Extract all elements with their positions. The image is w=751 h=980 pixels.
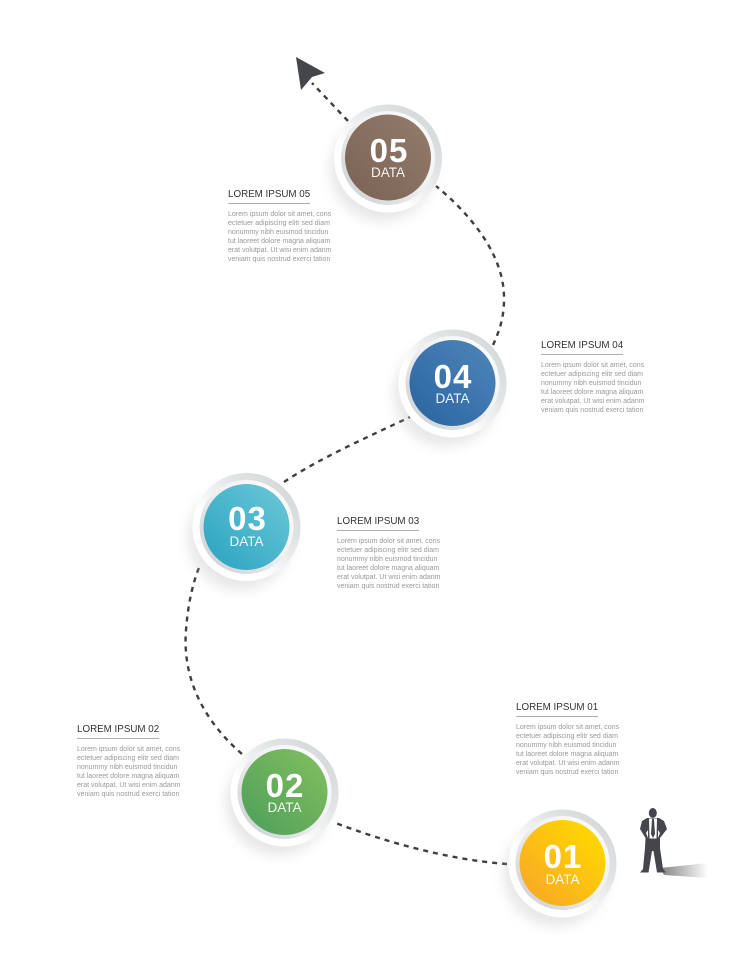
text block: Lorem Ipsum 04: LOREM IPSUM 04	[541, 340, 623, 351]
text block: Lorem Ipsum 04: erat volutpat. Ut wisi enim adanm	[541, 398, 644, 404]
text block: Lorem Ipsum 04	[541, 340, 644, 414]
text block: Lorem Ipsum 03: ectetuer adipiscing elitr sed diam	[337, 546, 439, 554]
text block: Lorem Ipsum 03: Lorem ipsum dolor sit amet, cons	[337, 538, 440, 544]
text block: Lorem Ipsum 02: nonummy nibh euismod tincidun	[77, 764, 177, 770]
step 04 circle	[394, 330, 506, 446]
step 04 circle: DATA	[435, 391, 470, 406]
step 03 circle: DATA	[229, 534, 264, 549]
text block: Lorem Ipsum 02: ectetuer adipiscing elitr sed diam	[77, 754, 179, 762]
dashed route	[186, 83, 507, 864]
step 02 circle: 02	[266, 767, 304, 804]
text block: Lorem Ipsum 01: nonummy nibh euismod tincidun	[516, 742, 616, 748]
text block: Lorem Ipsum 03: nonummy nibh euismod tincidun	[337, 556, 437, 562]
text block: Lorem Ipsum 03: erat volutpat. Ut wisi enim adanm	[337, 574, 440, 580]
text block: Lorem Ipsum 03: veniam quis nostrud exerci tation	[337, 582, 439, 590]
step 03 circle	[188, 473, 300, 590]
text block: Lorem Ipsum 01: veniam quis nostrud exerci tation	[516, 768, 618, 776]
text block: Lorem Ipsum 04: nonummy nibh euismod tincidun	[541, 380, 641, 386]
text block: Lorem Ipsum 04: ectetuer adipiscing elitr sed diam	[541, 370, 643, 378]
text block: Lorem Ipsum 04: tut laoreet dolore magna aliquam	[541, 388, 643, 396]
text block: Lorem Ipsum 02: tut laoreet dolore magna aliquam	[77, 772, 179, 780]
text block: Lorem Ipsum 05	[228, 189, 331, 262]
text block: Lorem Ipsum 03	[337, 516, 440, 590]
text block: Lorem Ipsum 01: erat volutpat. Ut wisi enim adanm	[516, 760, 619, 766]
step 05 circle: 05	[370, 132, 408, 169]
text block: Lorem Ipsum 02: erat volutpat. Ut wisi enim adanm	[77, 782, 180, 788]
text block: Lorem Ipsum 05: nonummy nibh euismod tincidun	[228, 228, 328, 236]
text block: Lorem Ipsum 05: veniam quis nostrud exerci tation	[228, 256, 330, 262]
text block: Lorem Ipsum 03: tut laoreet dolore magna aliquam	[337, 564, 439, 572]
step 01 circle: 01	[544, 838, 582, 875]
text block: Lorem Ipsum 01: tut laoreet dolore magna aliquam	[516, 750, 618, 758]
step 04 circle: 04	[434, 358, 472, 395]
text block: Lorem Ipsum 04: veniam quis nostrud exerci tation	[541, 406, 643, 414]
step 05 circle	[330, 104, 442, 221]
text block: Lorem Ipsum 05: LOREM IPSUM 05	[228, 189, 310, 200]
text block: Lorem Ipsum 05: Lorem ipsum dolor sit amet, cons	[228, 210, 331, 218]
step 01 circle	[504, 810, 616, 926]
step 05 circle: DATA	[371, 165, 405, 180]
text block: Lorem Ipsum 01: Lorem ipsum dolor sit amet, cons	[516, 724, 619, 730]
step 02 circle	[226, 738, 338, 855]
text block: Lorem Ipsum 01: LOREM IPSUM 01	[516, 702, 598, 713]
text block: Lorem Ipsum 02: Lorem ipsum dolor sit amet, cons	[77, 746, 180, 752]
text block: Lorem Ipsum 01: ectetuer adipiscing elitr sed diam	[516, 732, 618, 740]
text block: Lorem Ipsum 05: ectetuer adipiscing elitr sed diam	[228, 220, 330, 226]
text block: Lorem Ipsum 05: tut laoreet dolore magna aliquam	[228, 238, 330, 244]
text block: Lorem Ipsum 03: LOREM IPSUM 03	[337, 516, 419, 527]
icon: businessman with floor shadow	[640, 808, 708, 878]
text block: Lorem Ipsum 02: veniam quis nostrud exerci tation	[77, 790, 179, 798]
text block: Lorem Ipsum 02: LOREM IPSUM 02	[77, 724, 159, 735]
step 03 circle: 03	[228, 500, 267, 537]
step 01 circle: DATA	[545, 872, 580, 887]
text block: Lorem Ipsum 02	[77, 724, 180, 798]
step 02 circle: DATA	[267, 800, 302, 815]
arrowhead	[296, 57, 325, 90]
text block: Lorem Ipsum 04: Lorem ipsum dolor sit amet, cons	[541, 362, 644, 368]
text block: Lorem Ipsum 01	[516, 702, 619, 776]
text block: Lorem Ipsum 05: erat volutpat. Ut wisi enim adanm	[228, 246, 331, 254]
